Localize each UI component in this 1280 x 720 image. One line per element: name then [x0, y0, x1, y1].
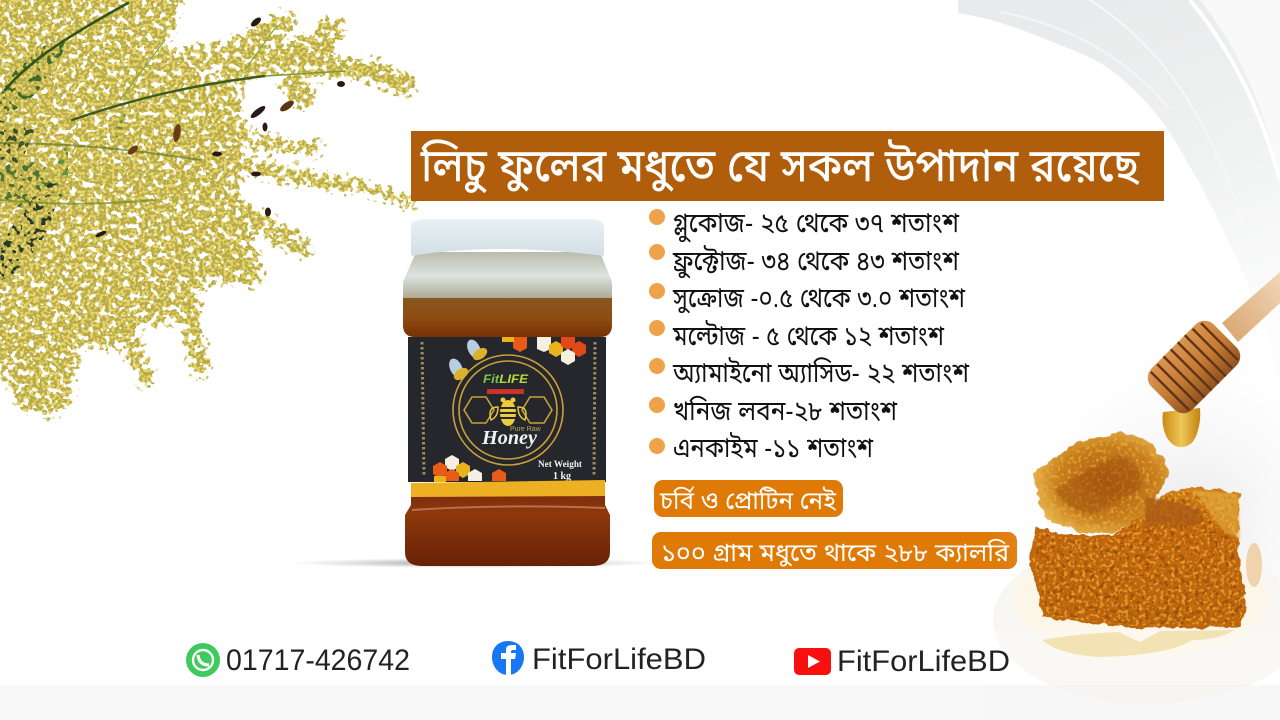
icon: youtube	[794, 648, 831, 675]
amber glaze	[1145, 497, 1201, 530]
item: amino acid: অ্যামাইনো অ্যাসিড- ২২ শতাংশ	[672, 357, 970, 388]
honeycomb on plate	[990, 320, 1280, 720]
translucent footer band	[0, 630, 1280, 720]
honey lower	[405, 496, 610, 566]
jar highlight	[412, 506, 605, 510]
upper comb	[1033, 432, 1168, 533]
item: enzyme: এনকাইম -১১ শতাংশ	[673, 432, 874, 463]
net weight: Net Weight	[538, 460, 583, 470]
upper comb highlights	[1037, 436, 1164, 529]
weight value: 1 kg	[553, 471, 571, 482]
dark leaves behind blossoms	[0, 42, 128, 285]
upper comb glaze	[1055, 455, 1141, 515]
lower comb	[1030, 487, 1247, 628]
background curved arcs	[958, 0, 1280, 380]
facebook contact: FitForLifeBD	[532, 643, 706, 676]
label	[408, 337, 606, 482]
soft backdrop	[990, 320, 1280, 720]
whatsapp contact: 01717-426742	[226, 644, 410, 677]
contact bar	[186, 641, 1010, 678]
lid	[411, 219, 604, 256]
glass neck	[403, 252, 612, 300]
fresh and healthy tag	[487, 389, 524, 394]
title text: লিচু ফুলের মধুতে যে সকল উপাদান রয়েছে	[420, 139, 1140, 195]
honeycomb top accents	[502, 337, 586, 365]
honey dipper	[1142, 272, 1280, 447]
ingredient list	[649, 208, 970, 463]
bee emblem	[490, 398, 526, 426]
title banner	[411, 131, 1164, 201]
icon: facebook	[492, 641, 524, 675]
dipper head	[1142, 315, 1246, 419]
lower comb texture	[1035, 491, 1243, 624]
bees on blossoms	[95, 16, 345, 238]
honey wordmark: Honey	[481, 427, 537, 449]
golden rim on lower comb	[1192, 490, 1240, 540]
item: fructose: ফ্রুক্টোজ- ৩৪ থেকে ৪৩ শতাংশ	[672, 245, 960, 279]
item: sucrose: সুক্রোজ -০.৫ থেকে ৩.০ শতাংশ	[672, 283, 966, 314]
bee illustrations	[446, 337, 489, 383]
honey drop	[1162, 408, 1200, 447]
honey puddle	[1042, 630, 1234, 657]
plate	[993, 537, 1280, 703]
flowering litchi branch	[0, 0, 410, 412]
branches	[0, 3, 345, 204]
yellow label band	[411, 480, 605, 498]
youtube contact: FitForLifeBD	[837, 645, 1010, 678]
side chains	[422, 342, 595, 476]
item: minerals: খনিজ লবন-২৮ শতাংশ	[673, 395, 898, 426]
jar shadow	[290, 558, 660, 568]
callout: calories: ১০০ গ্রাম মধুতে থাকে ২৮৮ ক্যালরি	[661, 538, 1010, 567]
item: maltose: মল্টোজ - ৫ থেকে ১২ শতাংশ	[672, 320, 945, 351]
honey jar	[290, 219, 660, 568]
handle	[1222, 272, 1280, 342]
honeycomb bottom accents	[433, 455, 506, 482]
callout: no fat or protein: চর্বি ও প্রোটিন নেই	[659, 485, 837, 515]
honey upper	[403, 298, 612, 337]
item: glucose: গ্লুকোজ- ২৫ থেকে ৩৭ শতাংশ	[673, 208, 960, 243]
icon: whatsapp	[186, 643, 220, 677]
bottom floor band	[0, 685, 1280, 720]
lower comb highlights	[1032, 489, 1245, 626]
pure raw caption: Pure Raw	[510, 426, 542, 433]
brand logo: FitLIFE	[483, 372, 529, 386]
label emblem	[453, 355, 563, 465]
blossom specks	[0, 0, 410, 412]
